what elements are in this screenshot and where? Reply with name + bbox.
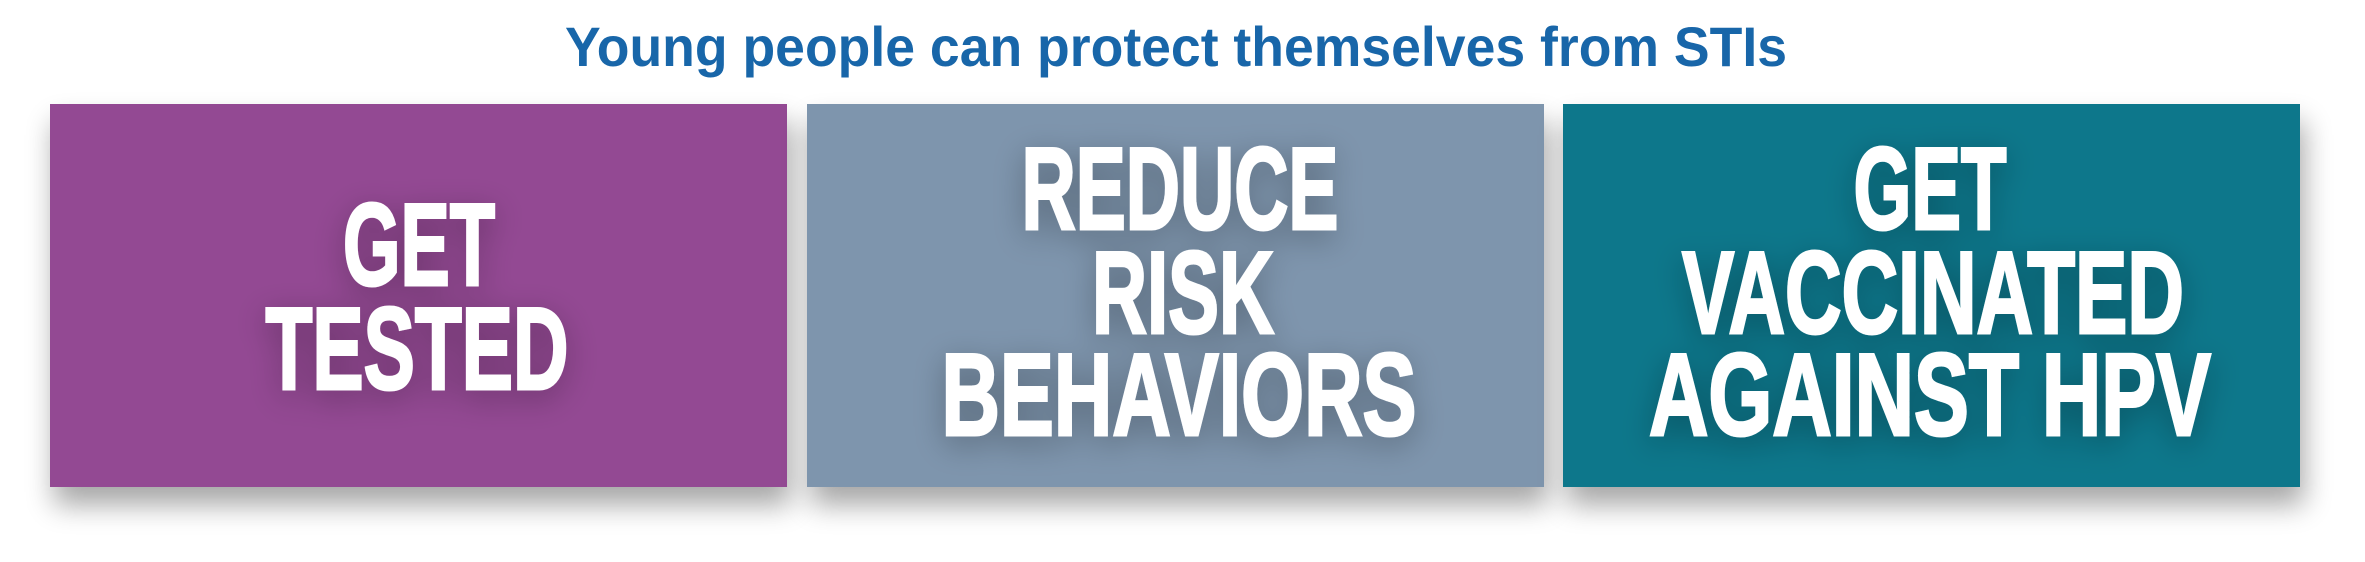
text: reduce risk behaviors: RISK <box>1092 227 1274 358</box>
text: get tested <box>266 179 568 414</box>
text: get vaccinated against hpv <box>1649 123 2211 460</box>
text: get tested: TESTED <box>266 283 568 414</box>
panel: reduce risk behaviors <box>807 104 1544 487</box>
text: reduce risk behaviors: BEHAVIORS <box>942 329 1416 460</box>
text: get tested: GET <box>343 179 495 310</box>
text: reduce risk behaviors <box>942 123 1416 460</box>
text: get vaccinated against hpv: GET <box>1854 123 2006 254</box>
title: Young people can protect themselves from STIs <box>565 15 1787 78</box>
panel: get vaccinated against hpv <box>1563 104 2300 487</box>
panel: get tested <box>50 104 787 487</box>
text: reduce risk behaviors: REDUCE <box>1022 123 1338 254</box>
